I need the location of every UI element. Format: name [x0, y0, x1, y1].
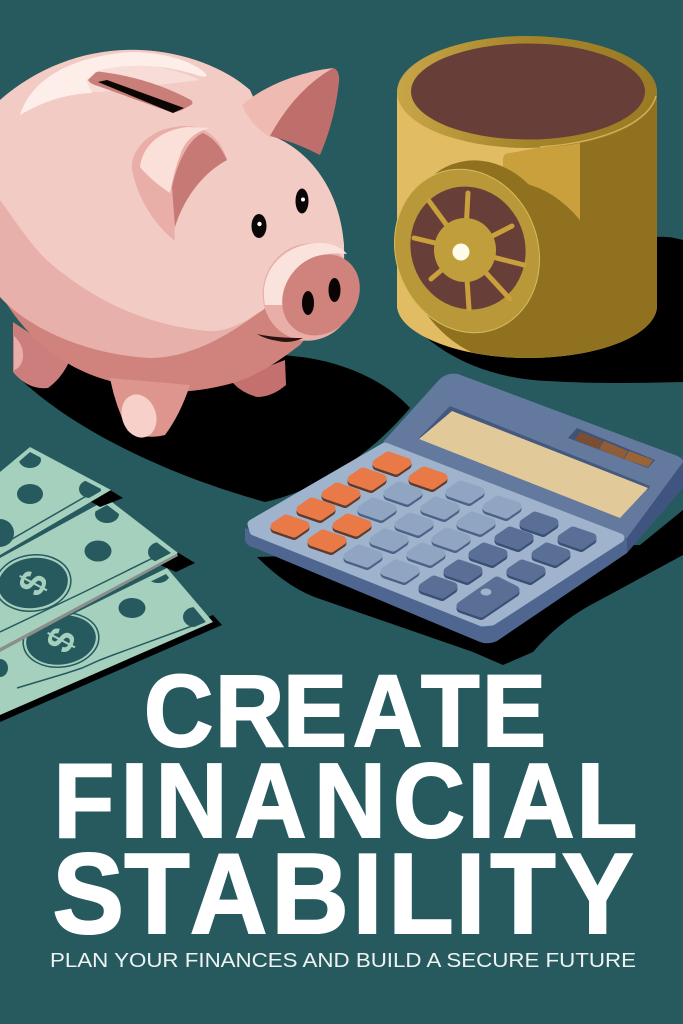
title line: STABILITY: STABILITY — [53, 831, 633, 958]
snout — [250, 231, 376, 353]
safe shaded side — [425, 90, 657, 358]
rim highlight — [540, 96, 656, 147]
display screen — [418, 406, 650, 518]
shadow: safe — [400, 237, 683, 383]
title line: CREATE: CREATE — [144, 653, 546, 768]
safe top rim — [397, 36, 657, 148]
shadow: calculator — [257, 510, 683, 665]
left leg — [13, 322, 70, 388]
shadow: piggy bank — [13, 340, 410, 502]
display panel — [383, 374, 683, 538]
middle banknote — [0, 499, 195, 652]
left ear — [132, 126, 227, 241]
body mid shade — [0, 200, 300, 358]
bottom banknote — [0, 565, 222, 722]
back leg — [233, 360, 286, 397]
body main — [0, 50, 344, 331]
eyes — [252, 188, 308, 238]
mouth — [257, 334, 303, 342]
wheel spokes — [414, 193, 524, 309]
right ear — [242, 68, 339, 155]
body lower shade — [0, 50, 345, 392]
safe body — [397, 90, 657, 358]
icon: piggy bank — [0, 50, 376, 442]
title — [53, 653, 637, 958]
wheel inner window — [393, 170, 543, 326]
wheel centre dot — [452, 244, 470, 260]
coin slot — [88, 72, 192, 113]
calculator right side — [620, 455, 683, 553]
icon: stack of banknotes — [0, 447, 222, 722]
calculator front edge — [245, 528, 627, 643]
icon: calculator — [245, 374, 683, 643]
bottom banknote: $ — [38, 621, 85, 660]
top banknote — [0, 447, 123, 555]
safe top opening — [411, 44, 645, 140]
safe side patch — [503, 140, 580, 220]
front leg — [110, 378, 190, 442]
middle banknote: $ — [10, 564, 57, 603]
wheel hub — [434, 218, 496, 282]
keys — [275, 456, 592, 596]
icon: safe — [372, 36, 657, 358]
wheel back rim — [383, 139, 581, 353]
solar panel — [568, 428, 655, 468]
subtitle: PLAN YOUR FINANCES AND BUILD A SECURE FUTURE — [50, 949, 636, 972]
title line: FINANCIAL: FINANCIAL — [53, 741, 637, 860]
body top sheen — [20, 65, 200, 115]
large equals key — [461, 581, 515, 616]
keypad plate — [252, 447, 620, 622]
body highlight — [20, 52, 206, 115]
wheel front ring — [372, 149, 562, 353]
